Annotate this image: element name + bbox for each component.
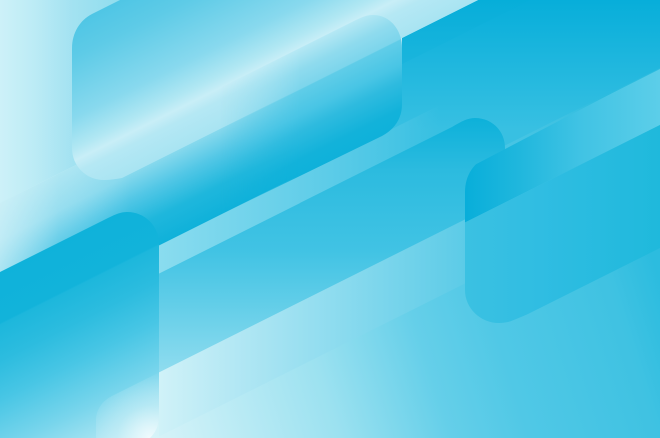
band: upper section of right shape	[465, 68, 660, 222]
band: faint darker wedge upper right	[402, 0, 530, 64]
band: pale stripe lower centre	[159, 220, 465, 436]
panel: lower section of right shape	[465, 125, 660, 340]
panel: central rounded shape	[159, 118, 505, 372]
band: top wedge pale gradient	[340, 0, 478, 60]
band: pale fade at left of sweep	[0, 138, 130, 325]
panel: upper right rounded corner shape	[234, 15, 402, 208]
panel: pale top left field	[0, 0, 130, 203]
panel: upper right field	[300, 0, 660, 248]
panel: right rounded shape	[465, 68, 660, 340]
panel: glowing rounded shape bottom left	[96, 372, 159, 438]
band: light stripe under the upper panel	[159, 105, 440, 274]
panel: large upper rounded shape	[72, 0, 478, 180]
band: diagonal light to dark sweep	[0, 53, 300, 325]
panel: lower left rounded shape	[0, 212, 159, 438]
